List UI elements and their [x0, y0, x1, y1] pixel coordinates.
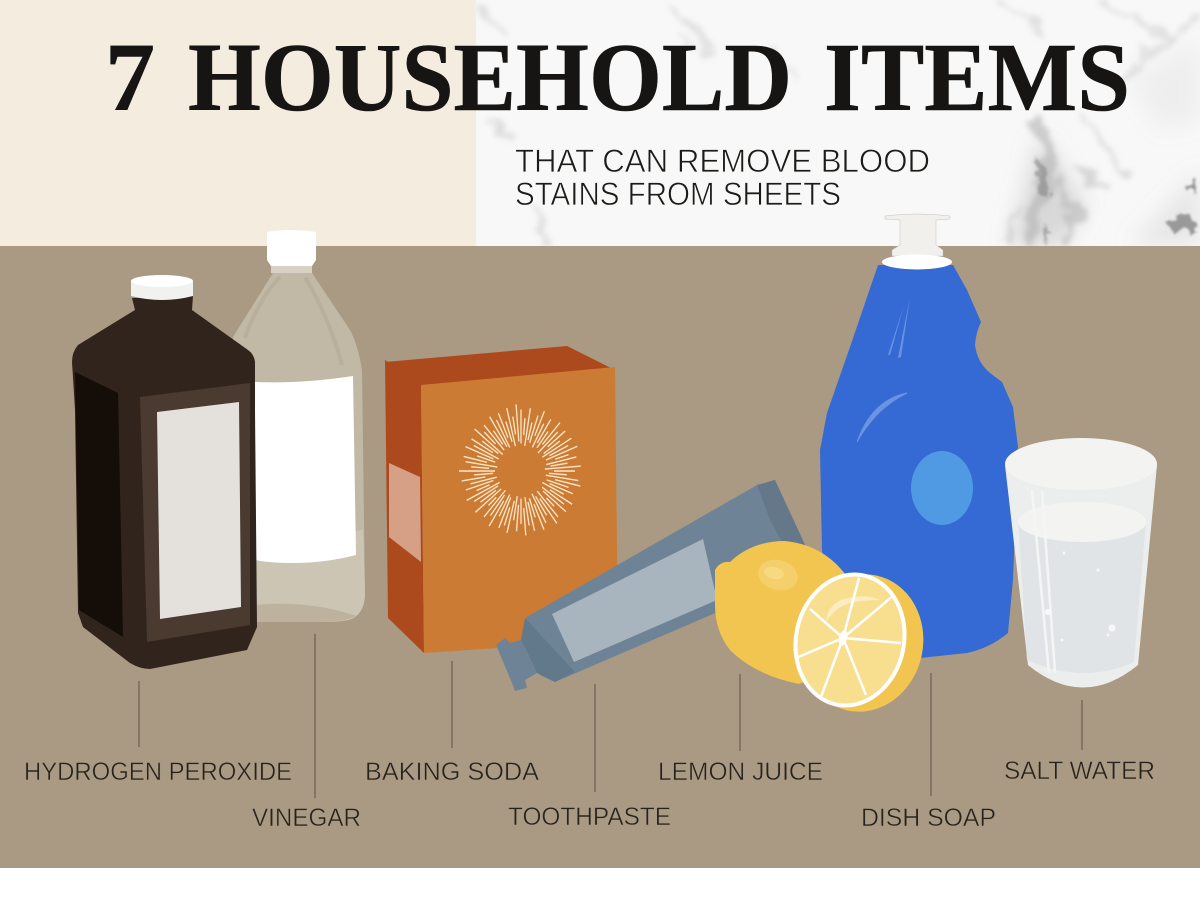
icon: glass of salt water [1005, 438, 1157, 688]
label: dish soap: DISH SOAP [861, 804, 996, 832]
subtitle [515, 143, 930, 212]
label: lemon juice: LEMON JUICE [658, 758, 823, 786]
panel: tan countertop [0, 246, 1200, 868]
label: toothpaste: TOOTHPASTE [508, 803, 671, 831]
panel: marble header block [476, 0, 1200, 246]
icon: dish soap bottle [820, 214, 1018, 658]
title: HOUSEHOLD [188, 24, 792, 131]
title [105, 24, 1130, 131]
icon: baking soda box [385, 346, 618, 653]
subtitle: THAT CAN REMOVE BLOOD [515, 143, 930, 179]
panel: cream header block [0, 0, 476, 246]
icon: hydrogen peroxide bottle [72, 275, 257, 669]
label: hydrogen peroxide: HYDROGEN PEROXIDE [24, 758, 292, 786]
icon: vinegar bottle [225, 230, 365, 622]
icon: sunburst [459, 404, 581, 535]
label: vinegar: VINEGAR [252, 804, 361, 832]
icon: lemon half [783, 563, 936, 723]
leader lines [139, 634, 1082, 798]
title: 7 [105, 24, 155, 131]
item labels [24, 757, 1155, 832]
icon: toothpaste tube [496, 480, 806, 691]
label: baking soda: BAKING SODA [365, 758, 539, 786]
title: ITEMS [824, 24, 1130, 131]
icon: whole lemon [715, 541, 860, 684]
label: salt water: SALT WATER [1004, 757, 1155, 785]
subtitle: STAINS FROM SHEETS [515, 176, 841, 212]
